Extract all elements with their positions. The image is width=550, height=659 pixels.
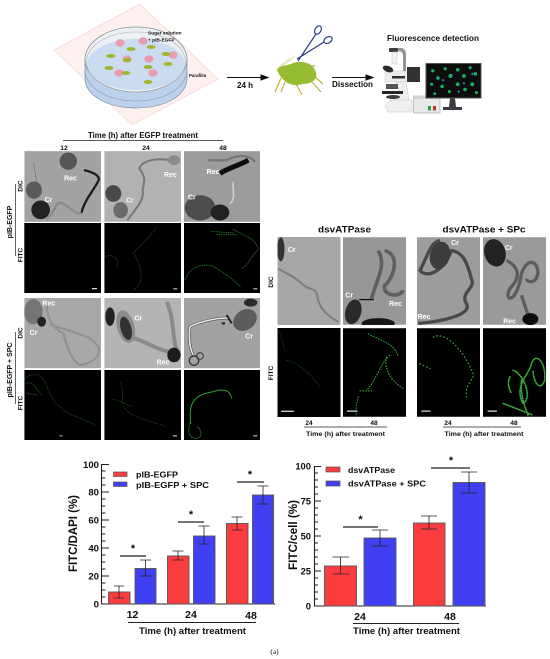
micrograph: pIB-EGFP 48 h DIC: Cr <box>188 194 196 202</box>
heading: time after EGFP treatment: Time (h) after EGFP treatment <box>88 131 198 140</box>
y tick labels <box>83 460 99 610</box>
y tick labels: 80 <box>88 488 99 498</box>
label: 24 h column: 24 <box>142 145 150 152</box>
micrograph: dsvATPase 24 h DIC <box>278 237 340 325</box>
icon: aphid <box>275 56 323 95</box>
label: pIB-EGFP + SPC group: pIB-EGFP + SPC <box>7 343 14 397</box>
micrograph: dsvATPase + SPc 24 h FITC <box>417 328 480 417</box>
y tick labels: 50 <box>301 530 311 542</box>
error bars <box>114 486 268 598</box>
micrograph: pIB-EGFP 12 h DIC <box>24 151 101 222</box>
micrograph: pIB-EGFP 24 h DIC <box>104 151 181 222</box>
significance markers <box>120 482 264 556</box>
x tick 24: 24 <box>185 609 197 621</box>
heading: dsvATPase: dsvATPase <box>318 224 371 236</box>
label: DIC row second group: DIC <box>18 327 24 339</box>
y tick labels: 60 <box>88 516 99 526</box>
y tick labels: 0 <box>306 600 311 612</box>
micrograph: dsvATPase 48 h FITC <box>343 328 406 417</box>
label: FITC row: FITC <box>18 247 24 262</box>
legend: dsvATPase <box>348 465 395 475</box>
y tick labels: 25 <box>301 566 311 576</box>
x tick labels: 12 <box>127 609 138 621</box>
legend <box>114 470 209 490</box>
micrograph: dsvATPase 48 h DIC: Cr <box>345 293 353 300</box>
icon: microscope <box>382 48 440 113</box>
micrograph: dsvATPase + SPc 24 h DIC: Rec <box>418 314 431 321</box>
micrograph: dsvATPase + SPc 48 h DIC: Cr <box>505 245 513 252</box>
icon: petri dish <box>85 27 187 108</box>
y axis <box>101 464 275 604</box>
micrograph: pIB-EGFP 48 h FITC <box>184 223 260 293</box>
micrograph: pIB-EGFP + SPC 48 h FITC <box>184 370 260 440</box>
micrograph: dsvATPase + SPc 48 h DIC: Rec <box>503 318 516 325</box>
label: parafilm: Parafilm <box>189 73 206 78</box>
micrograph: dsvATPase 24 h FITC <box>278 328 340 417</box>
micrograph: dsvATPase + SPc 24 h DIC <box>417 237 480 325</box>
label: 24 h: 24 h <box>237 81 253 90</box>
label: 12 h column: 12 <box>60 145 68 152</box>
micrograph: pIB-EGFP 48 h DIC: Rec <box>207 169 220 176</box>
label: right 24 h second: 24 <box>444 420 452 427</box>
micrograph: pIB-EGFP 24 h DIC: Rec <box>164 172 177 179</box>
label: 48 h column: 48 <box>219 145 227 152</box>
legend: pIB-EGFP + SPC <box>136 480 209 490</box>
legend <box>326 465 426 488</box>
label: FITC row second group: FITC <box>18 395 24 410</box>
label: time after treatment, dsvATPase: Time (h) after treatment <box>306 431 386 438</box>
micrograph: pIB-EGFP + SPC 24 h DIC: Rec <box>157 359 170 366</box>
micrograph: pIB-EGFP + SPC 12 h DIC <box>24 298 101 368</box>
bar chart: FITC/DAPI <box>68 460 275 636</box>
micrograph: pIB-EGFP + SPC 24 h FITC <box>104 370 181 440</box>
micrograph: dsvATPase 24 h DIC: Cr <box>288 247 296 254</box>
panel: experimental workflow <box>54 4 481 125</box>
icon: scissors <box>297 25 333 61</box>
y tick labels: 20 <box>88 572 99 582</box>
arrow: dissection <box>332 75 373 80</box>
y axis title: FITC/DAPI (%) <box>68 495 80 572</box>
label: sugar solution: Sugar solution <box>148 30 182 36</box>
micrograph: pIB-EGFP 24 h DIC: Cr <box>126 198 134 205</box>
micrograph: pIB-EGFP + SPC 12 h FITC <box>24 370 101 440</box>
micrograph: dsvATPase + SPc 48 h DIC <box>483 237 546 325</box>
x tick 48: 48 <box>444 611 456 623</box>
y tick labels: 100 <box>295 460 311 472</box>
micrograph: dsvATPase + SPc 24 h DIC: Cr <box>451 240 459 247</box>
label: right 24 h: 24 <box>305 420 313 427</box>
bar chart: FITC/DAPI: * <box>248 469 253 481</box>
label: time after treatment, dsvATPase + SPc: Time (h) after treatment <box>444 431 524 438</box>
micrograph: pIB-EGFP 12 h DIC: Rec <box>64 175 77 182</box>
arrow: 24 h <box>227 75 268 80</box>
label: DIC row right: DIC <box>268 276 275 288</box>
bar chart: FITC/cell: * <box>358 514 363 526</box>
micrograph: dsvATPase 48 h DIC <box>343 237 406 325</box>
micrograph: pIB-EGFP + SPC 12 h DIC: Cr <box>30 330 38 337</box>
y tick labels: 100 <box>83 460 99 471</box>
legend: dsvATPase + SPC <box>348 478 426 488</box>
bar chart: FITC/DAPI: * <box>189 509 194 521</box>
caption: (a): (a) <box>270 647 279 656</box>
legend: pIB-EGFP <box>136 470 178 480</box>
label: dissection: Dissection <box>332 79 373 89</box>
micrograph: pIB-EGFP + SPC 24 h DIC: Cr <box>134 316 142 323</box>
label: right 48 h: 48 <box>370 420 378 427</box>
y tick labels <box>295 460 311 612</box>
label: pIB-EGFP: + pIB-EGFP <box>148 38 175 44</box>
x tick 48: 48 <box>245 610 257 622</box>
micrograph: pIB-EGFP + SPC 24 h DIC <box>104 298 181 368</box>
label: fluorescence detection: Fluorescence detection <box>387 33 479 43</box>
label: DIC row: DIC <box>18 180 24 192</box>
error bars <box>332 472 477 574</box>
micrograph: pIB-EGFP + SPC 48 h DIC <box>184 298 260 368</box>
star 48 h: * <box>449 455 454 467</box>
x tick 24: 24 <box>354 611 366 623</box>
icon: parafilm sheet <box>54 4 218 125</box>
bar chart: FITC/cell <box>288 455 486 636</box>
y tick labels: 40 <box>88 544 99 554</box>
x axis title: Time (h) after treatment <box>353 626 460 636</box>
significance markers <box>343 468 470 527</box>
icon: monitor with fluorescent cells <box>426 64 481 110</box>
label: right 48 h second: 48 <box>510 420 518 427</box>
label: pIB-EGFP group: pIB-EGFP <box>7 205 14 238</box>
micrograph: pIB-EGFP 48 h DIC <box>184 151 260 222</box>
y tick labels: 0 <box>94 600 99 610</box>
scale bar: 12 h FITC <box>92 288 97 289</box>
y tick labels: 75 <box>301 496 311 506</box>
x axis title: Time (h) after treatment <box>139 626 246 636</box>
bars <box>324 482 485 606</box>
bar chart: FITC/DAPI: * <box>131 543 136 555</box>
micrograph: pIB-EGFP 12 h DIC: Cr <box>45 197 53 204</box>
micrograph: pIB-EGFP + SPC 48 h DIC: Cr <box>245 334 253 341</box>
label: FITC row right: FITC <box>268 365 275 380</box>
micrograph: dsvATPase + SPc 48 h FITC <box>483 328 546 417</box>
micrograph: pIB-EGFP 24 h FITC <box>104 223 181 293</box>
micrograph: dsvATPase 48 h DIC: Rec <box>389 301 402 308</box>
micrograph: pIB-EGFP 12 h FITC <box>24 223 101 293</box>
bars <box>108 495 274 604</box>
y axis title: FITC/cell (%) <box>288 500 300 570</box>
y axis <box>314 466 486 606</box>
micrograph: pIB-EGFP + SPC 12 h DIC: Rec <box>42 301 55 308</box>
heading: dsvATPase + SPc: dsvATPase + SPc <box>442 224 526 236</box>
